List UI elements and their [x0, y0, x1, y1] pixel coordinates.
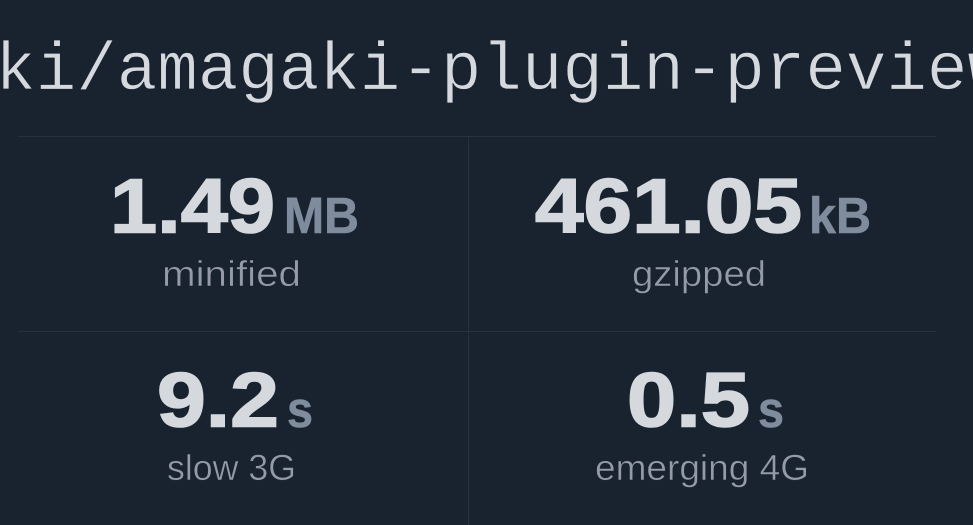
stat: gzipped size: kB	[809, 187, 871, 244]
stat: minified size: MB	[284, 187, 359, 244]
stat: gzipped size: gzipped	[632, 253, 766, 294]
stat: minified size	[110, 164, 359, 294]
stat: slow 3G download time: slow 3G	[167, 447, 296, 488]
stat: minified size: 1.49	[110, 164, 275, 250]
stat: slow 3G download time	[157, 358, 313, 488]
stat: minified size: minified	[162, 253, 301, 294]
stat: gzipped size	[535, 164, 871, 294]
stat: emerging 4G download time	[595, 358, 809, 488]
stat: emerging 4G download time: emerging 4G	[595, 447, 809, 488]
stat: emerging 4G download time: s	[758, 381, 784, 438]
stat: slow 3G download time: 9.2	[157, 358, 279, 444]
stat: emerging 4G download time: 0.5	[627, 358, 750, 444]
stat: slow 3G download time: s	[287, 381, 313, 438]
stat: gzipped size: 461.05	[535, 164, 802, 250]
